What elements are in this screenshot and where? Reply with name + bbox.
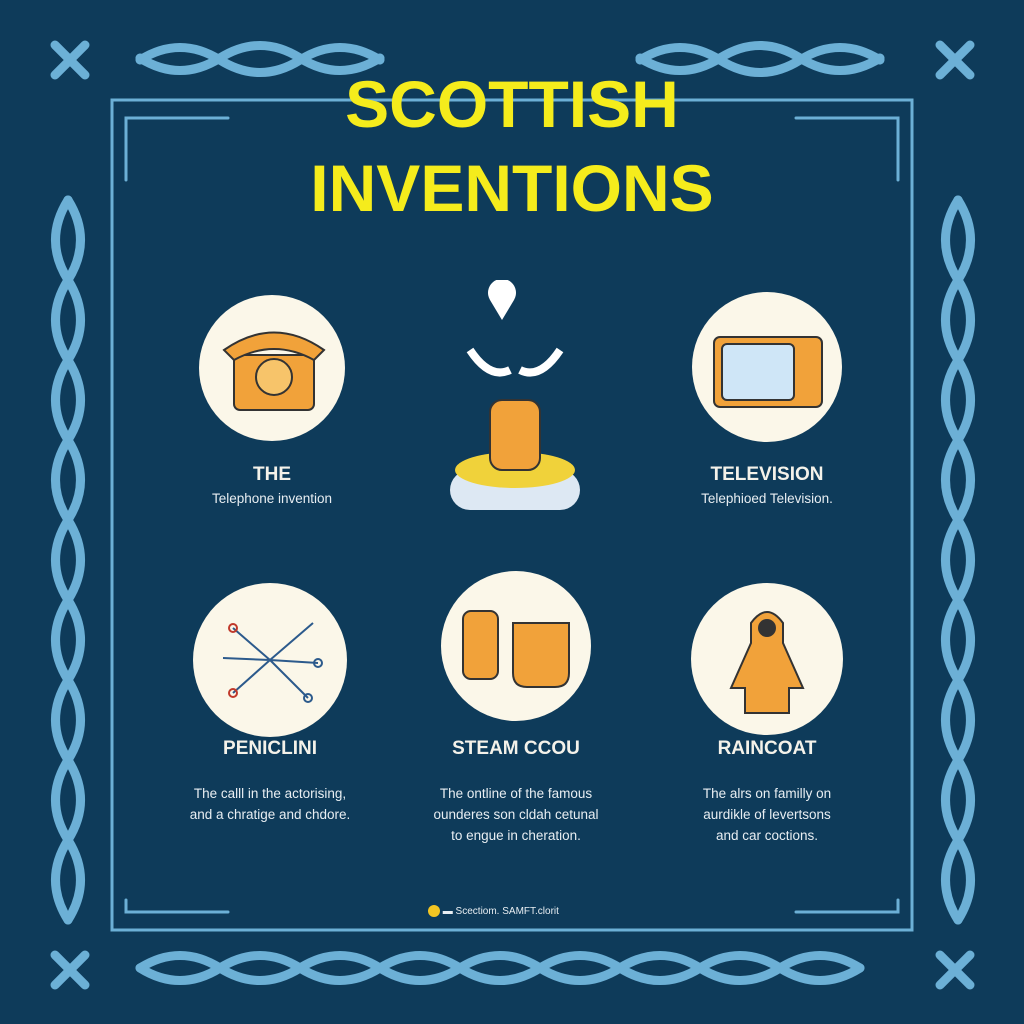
heading: TELEVISION — [711, 464, 823, 485]
icon: steam — [441, 571, 591, 721]
panel: center icon — [450, 280, 580, 510]
text: The calll in the actorising, — [194, 786, 346, 801]
heading: PENICLINI — [223, 738, 317, 759]
panel: television — [692, 292, 842, 506]
footer: ▬ Scectiom. SAMFT.clorit — [443, 906, 559, 917]
text: The alrs on familly on — [703, 786, 831, 801]
panel: steam — [433, 571, 599, 843]
icon: telephone — [199, 295, 345, 441]
icon: tv — [692, 292, 842, 442]
text: aurdikle of levertsons — [703, 807, 831, 822]
text: Telephioed Television. — [701, 491, 833, 506]
text: Telephone invention — [212, 491, 332, 506]
icon: molecules — [193, 583, 347, 737]
heading: RAINCOAT — [718, 738, 816, 759]
heading: THE — [253, 464, 291, 485]
text: and a chratige and chdore. — [190, 807, 350, 822]
panel: telephone — [199, 295, 345, 506]
text: to engue in cheration. — [451, 828, 581, 843]
panel: penicillin — [190, 583, 350, 822]
title: INVENTIONS — [310, 151, 714, 225]
icon: raincoat — [691, 583, 843, 735]
text: The ontline of the famous — [440, 786, 592, 801]
text: and car coctions. — [716, 828, 818, 843]
text: ounderes son cldah cetunal — [433, 807, 599, 822]
title — [310, 67, 714, 225]
text — [190, 786, 350, 822]
panel: raincoat — [691, 583, 843, 843]
title: SCOTTISH — [345, 67, 679, 141]
text — [433, 786, 599, 843]
heading: STEAM CCOU — [452, 738, 580, 759]
text — [703, 786, 831, 843]
